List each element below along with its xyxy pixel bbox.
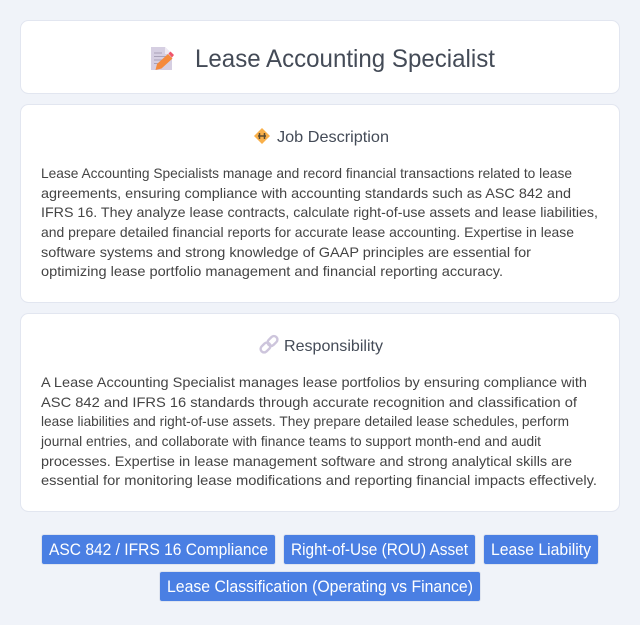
tag: ASC 842 / IFRS 16 Compliance: ASC 842 / IFRS 16 Compliance	[49, 541, 268, 559]
heading: job description: Job Description	[277, 129, 389, 146]
text block: responsibility: ASC 842 and IFRS 16 standards through accurate recognition and classification of	[41, 394, 577, 410]
icon: diamond road sign	[254, 128, 270, 144]
text block: responsibility	[40, 374, 597, 488]
panel: title card	[20, 20, 620, 94]
tag: Lease Liability: Lease Liability	[491, 541, 592, 559]
panel: job description	[20, 104, 620, 302]
text block: job description: Lease Accounting Specialists manage and record financial transactions related to lease	[41, 165, 572, 181]
text block: job description	[41, 165, 598, 279]
text block: job description: and prepare detailed financial reports for accurate lease accounting. Expertise in lease	[41, 224, 574, 240]
panel: responsibility	[20, 314, 620, 512]
title: Lease Accounting Specialist	[195, 45, 495, 73]
text block: responsibility: journal entries, and collaborate with finance teams to support month-end and audit	[40, 433, 541, 449]
text block: responsibility: A Lease Accounting Specialist manages lease portfolios by ensuring compliance with	[41, 374, 587, 390]
tag: Right-of-Use (ROU) Asset: Right-of-Use (ROU) Asset	[291, 541, 468, 559]
tag: Lease Classification (Operating vs Finance): Lease Classification (Operating vs Finance)	[167, 578, 473, 596]
text block: responsibility: lease liabilities and right-of-use assets. They prepare detailed lease schedules, perform	[41, 413, 569, 429]
text block: job description: agreements, ensuring compliance with accounting standards such as ASC 842 and	[41, 185, 571, 201]
tag: Lease Liability	[484, 534, 598, 564]
icon: chain link	[259, 335, 279, 354]
text block: job description: optimizing lease portfolio management and financial reporting accuracy.	[41, 263, 503, 279]
tag: ASC 842 / IFRS 16 Compliance	[42, 534, 276, 564]
tag: Right-of-Use (ROU) Asset	[284, 534, 476, 564]
text block: responsibility: processes. Expertise in lease management software and strong analytical skills are	[41, 453, 572, 469]
tag: Lease Classification (Operating vs Finance)	[160, 572, 480, 602]
text block: job description: software systems and strong knowledge of GAAP principles are essential for	[41, 244, 531, 260]
text block: responsibility: essential for monitoring lease modifications and reporting financial impacts effectively.	[41, 472, 597, 488]
icon: document with pencil	[151, 47, 174, 70]
heading: responsibility: Responsibility	[284, 338, 383, 355]
text block: job description: IFRS 16. They analyze lease contracts, calculate right-of-use assets and lease liabilities,	[41, 204, 598, 220]
